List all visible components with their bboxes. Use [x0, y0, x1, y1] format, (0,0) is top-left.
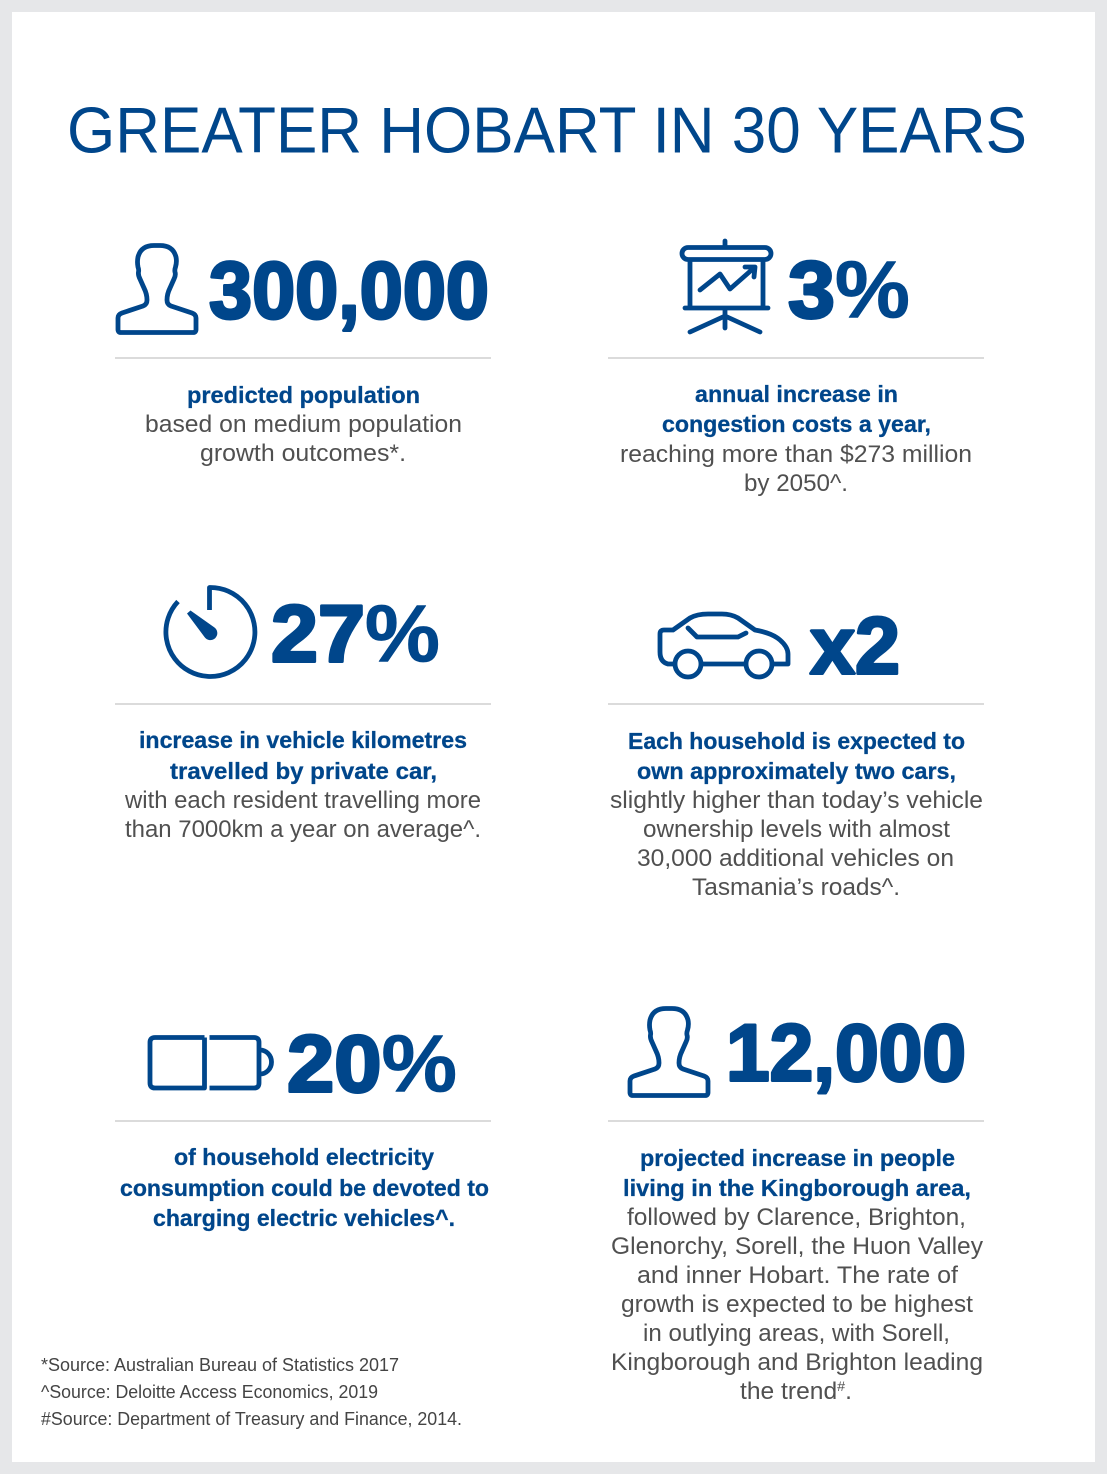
stat: 27%: 27% — [271, 590, 440, 680]
description: vehicle kilometres: travelled by private car, — [170, 758, 437, 784]
stat: 20%: 20% — [287, 1020, 457, 1110]
description: population: growth outcomes*. — [200, 440, 406, 467]
description: Kingborough growth: Glenorchy, Sorell, the Huon Valley — [611, 1233, 983, 1260]
description: household cars — [610, 728, 983, 901]
description: congestion: congestion costs a year, — [662, 411, 931, 437]
description: Kingborough growth: growth is expected to be highest — [621, 1291, 973, 1318]
description: Kingborough growth: and inner Hobart. The rate of — [637, 1262, 958, 1289]
stat: 12,000: 12,000 — [726, 1008, 966, 1098]
description: Kingborough growth: the trend — [740, 1378, 835, 1405]
footnotes: sources: #Source: Department of Treasury and Finance, 2014. — [41, 1409, 462, 1429]
description: household cars: 30,000 additional vehicles on — [637, 845, 954, 872]
icon: person — [118, 246, 196, 332]
description: Kingborough growth: in outlying areas, with Sorell, — [643, 1320, 950, 1347]
description: vehicle kilometres — [124, 727, 481, 843]
description: household cars: Each household is expected to — [628, 728, 965, 754]
description: electricity: charging electric vehicles^. — [153, 1205, 455, 1231]
panel: vehicle kilometres — [115, 587, 491, 843]
description: vehicle kilometres: increase in vehicle kilometres — [139, 727, 467, 753]
stat: x2: x2 — [810, 602, 900, 692]
description: electricity: consumption could be devoted to — [120, 1175, 489, 1201]
panel: Kingborough growth — [608, 1008, 984, 1405]
icon: stopwatch — [166, 587, 255, 676]
footnotes: sources: *Source: Australian Bureau of Statistics 2017 — [41, 1355, 399, 1375]
title: GREATER HOBART IN 30 YEARS — [67, 94, 1027, 166]
description: vehicle kilometres: than 7000km a year on average^. — [125, 816, 481, 843]
description: Kingborough growth: followed by Clarence, Brighton, — [627, 1204, 966, 1231]
panel: household cars — [608, 602, 984, 901]
description: congestion: annual increase in — [695, 381, 898, 407]
description: household cars: ownership levels with almost — [643, 816, 950, 843]
description: vehicle kilometres: with each resident travelling more — [124, 787, 481, 814]
description: Kingborough growth: # — [837, 1378, 845, 1394]
panel: congestion — [608, 241, 984, 497]
stat: 3%: 3% — [788, 246, 910, 336]
description: population: predicted population — [187, 382, 420, 408]
description: household cars: Tasmania’s roads^. — [692, 874, 900, 901]
icon: battery — [150, 1038, 272, 1088]
panel: electricity — [115, 1020, 491, 1231]
description: electricity: of household electricity — [174, 1144, 434, 1170]
description: household cars: slightly higher than today’s vehicle — [610, 787, 983, 814]
description: population: based on medium population — [145, 411, 462, 438]
stat: 300,000: 300,000 — [209, 246, 489, 336]
description: electricity — [120, 1144, 489, 1231]
description: Kingborough growth: Kingborough and Brighton leading — [611, 1349, 983, 1376]
description: population — [145, 382, 462, 467]
icon: presentation chart — [682, 241, 771, 332]
footnotes: sources — [41, 1355, 462, 1429]
description: Kingborough growth: living in the Kingborough area, — [623, 1175, 971, 1201]
description: Kingborough growth — [611, 1145, 983, 1405]
footnotes: sources: ^Source: Deloitte Access Economics, 2019 — [41, 1382, 378, 1402]
description: congestion — [620, 381, 972, 497]
description: household cars: own approximately two cars, — [637, 758, 956, 784]
icon: car — [660, 614, 788, 677]
description: Kingborough growth: projected increase in people — [640, 1145, 955, 1171]
description: congestion: by 2050^. — [744, 470, 848, 497]
icon: person — [630, 1008, 708, 1096]
description: congestion: reaching more than $273 million — [620, 441, 972, 468]
description: Kingborough growth: . — [845, 1378, 852, 1405]
panel: population — [115, 246, 491, 467]
